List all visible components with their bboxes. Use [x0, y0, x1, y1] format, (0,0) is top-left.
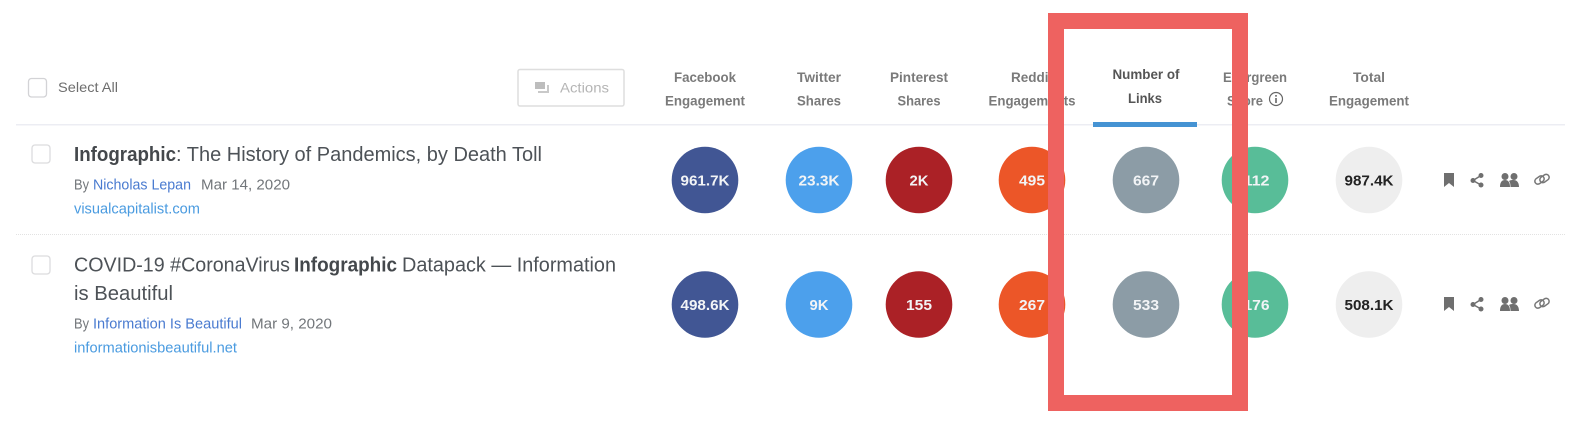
icon: info — [1270, 92, 1282, 106]
row 1 metric: Pinterest: 2K — [910, 172, 929, 190]
row 2 byline: Information Is Beautiful — [93, 316, 242, 332]
row 1 action icons — [1444, 173, 1550, 188]
header: Pinterest Shares: Pinterest — [890, 69, 948, 85]
header: Facebook Engagement: Engagement — [665, 92, 745, 108]
toolbar: select all and actions — [28, 70, 624, 106]
header: Number of Links (active): Links — [1128, 90, 1162, 106]
row 1 — [32, 143, 1550, 218]
row 2 byline: Mar 9, 2020 — [251, 316, 332, 332]
row 2 metric: Twitter: 9K — [810, 297, 829, 314]
row 1 metric: Links: 667 — [1133, 172, 1159, 190]
header: Total Engagement: Engagement — [1329, 92, 1409, 108]
header: Total Engagement: Total — [1353, 69, 1385, 85]
row 1 metric: Pinterest — [886, 147, 952, 213]
row 1 byline: Nicholas Lepan — [93, 178, 191, 194]
row 2 — [32, 254, 1550, 356]
row 1 metric: Twitter — [786, 147, 852, 213]
header: Number of Links (active): Number of — [1112, 66, 1180, 82]
row 1 metric: Reddit — [999, 147, 1065, 213]
row 2 metric: Pinterest: 155 — [906, 297, 932, 314]
row 2 metric: Reddit: 267 — [1019, 297, 1045, 314]
row 1 metric: Facebook: 961.7K — [680, 172, 730, 190]
row 1 metric: Reddit: 495 — [1019, 172, 1045, 190]
row 1 title: : The History of Pandemics, by Death Toll — [176, 143, 542, 166]
row 1 metric: Evergreen: 112 — [1244, 172, 1270, 190]
row 2 metric: Reddit — [999, 271, 1065, 338]
row 1 metric: Twitter: 23.3K — [798, 172, 840, 190]
row 1 metric: Facebook — [672, 147, 738, 213]
row 2 checkbox — [32, 256, 50, 274]
row 1 metric: Links — [1113, 147, 1179, 213]
row 2 metric: Facebook: 498.6K — [680, 297, 730, 314]
row 2 domain: informationisbeautiful.net — [74, 340, 237, 356]
row 2 metric: Facebook — [672, 271, 738, 338]
row 2 title: Datapack — Information — [402, 254, 616, 276]
red highlight frame around Number of Links column — [1056, 21, 1240, 403]
row 1 title: Infographic — [74, 143, 176, 166]
row 2 title: Infographic — [294, 254, 397, 276]
row 2 metric: Pinterest — [886, 271, 952, 338]
row 2 action icons — [1444, 297, 1550, 312]
row 2 metric: Evergreen: 176 — [1244, 297, 1270, 314]
header: Evergreen Score: Score — [1227, 92, 1263, 108]
row 2 title: COVID-19 #CoronaVirus — [74, 254, 290, 276]
row 2 title: is Beautiful — [74, 282, 173, 305]
results table — [16, 66, 1565, 356]
header: Facebook Engagement: Facebook — [674, 69, 736, 85]
row 2 metric: Total: 508.1K — [1344, 297, 1394, 314]
header: Reddit Engagements: Engagements — [988, 92, 1076, 108]
header: Evergreen Score: Evergreen — [1223, 69, 1287, 85]
row 1 metric: Total — [1336, 147, 1402, 213]
row 1 domain: visualcapitalist.com — [74, 202, 200, 218]
row 1 metric: Evergreen — [1222, 147, 1288, 213]
row 1 byline: Mar 14, 2020 — [201, 178, 290, 194]
select all checkbox — [28, 78, 46, 97]
row 2 metric: Links — [1113, 271, 1179, 338]
row 2 metric: Total — [1336, 271, 1402, 338]
header: Twitter Shares: Shares — [797, 92, 841, 108]
row 2 metric: Evergreen — [1222, 271, 1288, 338]
row 1 metric: Total: 987.4K — [1344, 172, 1394, 190]
row 1 checkbox — [32, 145, 50, 163]
row 2 byline: By — [74, 316, 90, 332]
row 2 metric: Twitter — [786, 271, 852, 338]
header: Reddit Engagements: Reddit — [1011, 69, 1053, 85]
select all label: Select All — [58, 79, 118, 95]
actions button: Actions — [560, 80, 609, 96]
column headers — [665, 66, 1409, 108]
header: Pinterest Shares: Shares — [898, 92, 941, 108]
active column underline — [1093, 122, 1197, 127]
actions button — [518, 70, 624, 106]
row 2 metric: Links: 533 — [1133, 297, 1159, 314]
header: Twitter Shares: Twitter — [797, 69, 842, 85]
row 1 byline: By — [74, 178, 90, 194]
